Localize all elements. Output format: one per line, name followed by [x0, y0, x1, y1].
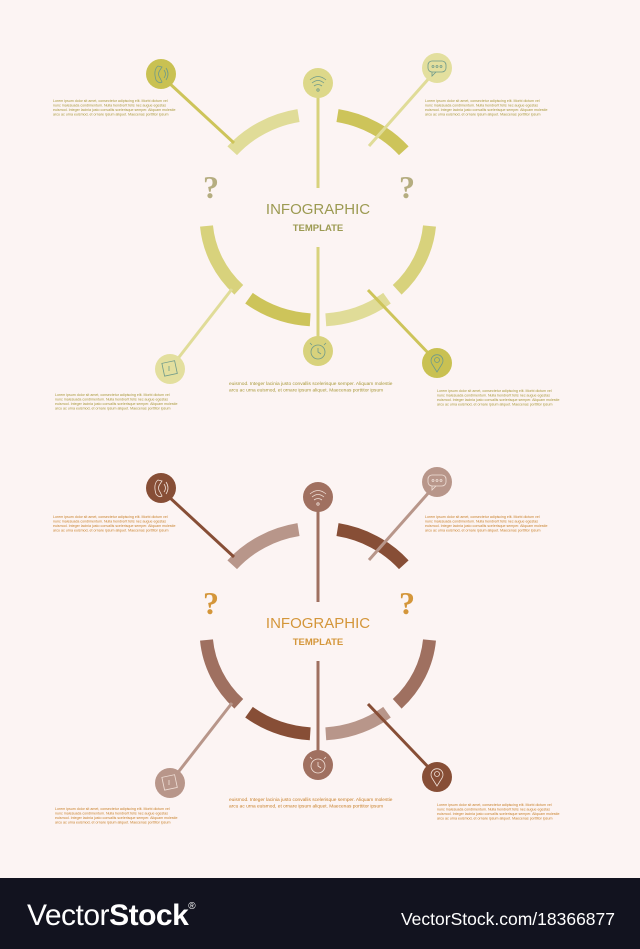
footer logo: VectorStock [27, 899, 188, 932]
text blocks: Lorem ipsum dolor sit amet, consectetur adipiscing elit. Morbi dictum vel [55, 393, 170, 397]
text blocks: euismod. Integer lacinia justo convallis scelerisque semper. Aliquam molestie [53, 524, 175, 528]
text blocks: nunc malesuada condimentum. Nulla hendrerit felis nec augue egestas [425, 520, 538, 524]
text blocks: euismod. Integer lacinia justo convallis scelerisque semper. Aliquam molestie [55, 402, 177, 406]
footer url: VectorStock.com/18366877 [401, 909, 615, 929]
icons [155, 475, 446, 790]
text blocks: Lorem ipsum dolor sit amet, consectetur adipiscing elit. Morbi dictum vel [55, 807, 170, 811]
question marks: ? [203, 169, 219, 205]
text blocks: nunc malesuada condimentum. Nulla hendrerit felis nec augue egestas [53, 520, 166, 524]
text blocks: arcu ac urna euismod, et ornare ipsum aliquet. Maecenas porttitor ipsum [437, 816, 552, 820]
diagram: top (yellow): TEMPLATE [293, 223, 343, 234]
text blocks: arcu ac urna euismod, et ornare ipsum aliquet. Maecenas porttitor ipsum [425, 112, 540, 116]
diagram: top (yellow) [53, 53, 559, 410]
text blocks: Lorem ipsum dolor sit amet, consectetur adipiscing elit. Morbi dictum vel [425, 515, 540, 519]
text blocks: Lorem ipsum dolor sit amet, consectetur adipiscing elit. Morbi dictum vel [437, 803, 552, 807]
text blocks: arcu ac urna euismod, et ornare ipsum aliquet. Maecenas porttitor ipsum [55, 406, 170, 410]
text blocks: nunc malesuada condimentum. Nulla hendrerit felis nec augue egestas [425, 104, 538, 108]
text blocks: arcu ac urna euismod, et ornare ipsum aliquet. Maecenas porttitor ipsum [437, 402, 552, 406]
text blocks: nunc malesuada condimentum. Nulla hendrerit felis nec augue egestas [55, 812, 168, 816]
text blocks [53, 99, 559, 410]
question marks: ? [399, 169, 415, 205]
icon circles [146, 53, 452, 384]
text blocks: nunc malesuada condimentum. Nulla hendrerit felis nec augue egestas [53, 104, 166, 108]
text blocks: nunc malesuada condimentum. Nulla hendrerit felis nec augue egestas [55, 398, 168, 402]
text blocks: arcu ac urna euismod, et ornare ipsum aliquet. Maecenas porttitor ipsum [229, 804, 383, 810]
ring arcs [206, 116, 430, 320]
question marks: ? [399, 585, 415, 621]
title: INFOGRAPHIC [266, 201, 370, 218]
text blocks: nunc malesuada condimentum. Nulla hendrerit felis nec augue egestas [437, 808, 550, 812]
text blocks: euismod. Integer lacinia justo convallis scelerisque semper. Aliquam molestie [55, 816, 177, 820]
text blocks: euismod. Integer lacinia justo convallis scelerisque semper. Aliquam molestie [53, 108, 175, 112]
text blocks: euismod. Integer lacinia justo convallis scelerisque semper. Aliquam molestie [437, 812, 559, 816]
question marks [203, 169, 415, 205]
text blocks: arcu ac urna euismod, et ornare ipsum aliquet. Maecenas porttitor ipsum [55, 820, 170, 824]
text blocks: euismod. Integer lacinia justo convallis scelerisque semper. Aliquam molestie [229, 797, 393, 803]
text blocks: arcu ac urna euismod, et ornare ipsum aliquet. Maecenas porttitor ipsum [425, 528, 540, 532]
icon circles [146, 467, 452, 798]
text blocks: arcu ac urna euismod, et ornare ipsum aliquet. Maecenas porttitor ipsum [229, 388, 383, 394]
text blocks: arcu ac urna euismod, et ornare ipsum aliquet. Maecenas porttitor ipsum [53, 528, 168, 532]
ring arcs [206, 530, 430, 734]
text blocks: euismod. Integer lacinia justo convallis scelerisque semper. Aliquam molestie [437, 398, 559, 402]
diagram: bottom (brown): TEMPLATE [293, 637, 343, 648]
question marks: ? [203, 585, 219, 621]
footer logo: ® [188, 901, 196, 912]
question marks [203, 585, 415, 621]
icons [155, 61, 446, 376]
spokes [168, 76, 432, 361]
text blocks: arcu ac urna euismod, et ornare ipsum aliquet. Maecenas porttitor ipsum [53, 112, 168, 116]
spokes [168, 490, 432, 775]
diagram: bottom (brown) [53, 467, 559, 824]
text blocks: euismod. Integer lacinia justo convallis scelerisque semper. Aliquam molestie [425, 524, 547, 528]
text blocks [53, 515, 559, 824]
text blocks: Lorem ipsum dolor sit amet, consectetur adipiscing elit. Morbi dictum vel [425, 99, 540, 103]
text blocks: euismod. Integer lacinia justo convallis scelerisque semper. Aliquam molestie [229, 381, 393, 387]
text blocks: Lorem ipsum dolor sit amet, consectetur adipiscing elit. Morbi dictum vel [53, 99, 168, 103]
text blocks: nunc malesuada condimentum. Nulla hendrerit felis nec augue egestas [437, 394, 550, 398]
text blocks: Lorem ipsum dolor sit amet, consectetur adipiscing elit. Morbi dictum vel [53, 515, 168, 519]
text blocks: euismod. Integer lacinia justo convallis scelerisque semper. Aliquam molestie [425, 108, 547, 112]
text blocks: Lorem ipsum dolor sit amet, consectetur adipiscing elit. Morbi dictum vel [437, 389, 552, 393]
title: INFOGRAPHIC [266, 615, 370, 632]
footer bar [0, 878, 640, 949]
